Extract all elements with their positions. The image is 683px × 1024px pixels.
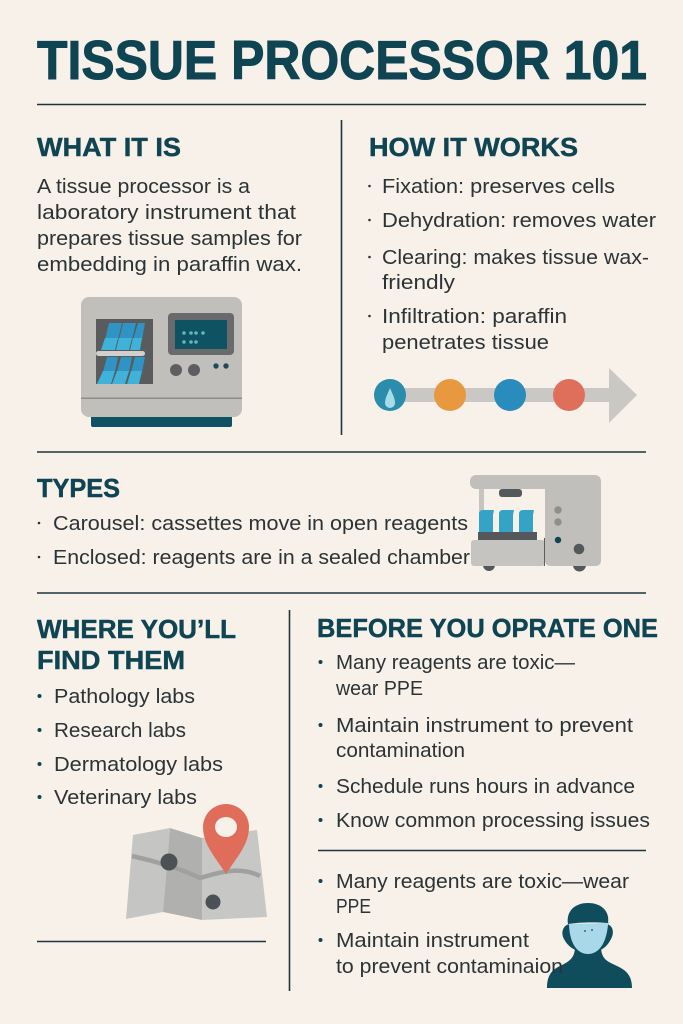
list: safety repeat: Many reagents are toxic—wear: [336, 870, 629, 893]
list: safety and maintenance: Know common processing issues: [336, 809, 650, 832]
list: safety repeat: PPE: [336, 895, 371, 918]
heading: where you'll find them: [37, 616, 236, 675]
heading: types: TYPES: [37, 475, 120, 503]
list: safety and maintenance: Many reagents are toxic—: [336, 651, 575, 674]
list: processor types: Carousel: cassettes move in open reagents: [53, 512, 468, 535]
list: safety repeat: to prevent contaminaion: [336, 955, 563, 978]
icon: person wearing mask: [547, 903, 632, 988]
list: safety and maintenance: [318, 651, 650, 832]
heading: before you oprate one: BEFORE YOU OPRATE ONE: [317, 615, 658, 643]
panel: types: [37, 475, 601, 572]
list: process steps: Fixation: preserves cells: [382, 175, 615, 198]
text block: definition: A tissue processor is a: [37, 175, 251, 198]
list: lab locations: Dermatology labs: [54, 753, 223, 776]
panel: what it is: [37, 134, 302, 427]
text block: definition: laboratory instrument that: [37, 201, 296, 224]
text block: definition: embedding in paraffin wax.: [37, 253, 302, 276]
icon: tissue processor machine: [81, 297, 242, 427]
heading: how it works: HOW IT WORKS: [369, 134, 578, 162]
list: safety repeat: Maintain instrument: [336, 929, 529, 952]
list: safety and maintenance: contamination: [336, 739, 465, 762]
list: safety and maintenance: Schedule runs hours in advance: [336, 775, 635, 798]
heading: where you'll find them: WHERE YOU’LL: [37, 616, 236, 644]
icon: map with location pin: [126, 804, 267, 920]
list: process steps: Infiltration: paraffin: [382, 305, 567, 328]
list: process steps: friendly: [382, 271, 456, 294]
list: processor types: [38, 512, 470, 569]
panel: where you'll find them: [37, 616, 267, 920]
heading: what it is: WHAT IT IS: [37, 134, 181, 162]
arrow: process timeline: [374, 368, 637, 423]
text block: definition: [37, 175, 302, 276]
list: safety repeat: [318, 870, 629, 978]
list: lab locations: Pathology labs: [54, 685, 195, 708]
list: process steps: [368, 175, 656, 354]
text block: definition: prepares tissue samples for: [37, 227, 302, 250]
list: safety and maintenance: Maintain instrument to prevent: [336, 714, 633, 737]
list: lab locations: [38, 685, 223, 809]
heading: where you'll find them: FIND THEM: [37, 647, 185, 675]
panel: before you operate one: [317, 615, 658, 988]
list: safety and maintenance: wear PPE: [335, 677, 423, 700]
list: process steps: Clearing: makes tissue wax-: [382, 246, 649, 269]
icon: enclosed processor machine: [470, 475, 601, 572]
list: lab locations: Veterinary labs: [54, 786, 197, 809]
list: process steps: Dehydration: removes water: [382, 209, 656, 232]
list: process steps: penetrates tissue: [382, 331, 549, 354]
list: processor types: Enclosed: reagents are in a sealed chamber: [53, 546, 470, 569]
panel: how it works: [368, 134, 656, 423]
list: lab locations: Research labs: [54, 719, 186, 742]
